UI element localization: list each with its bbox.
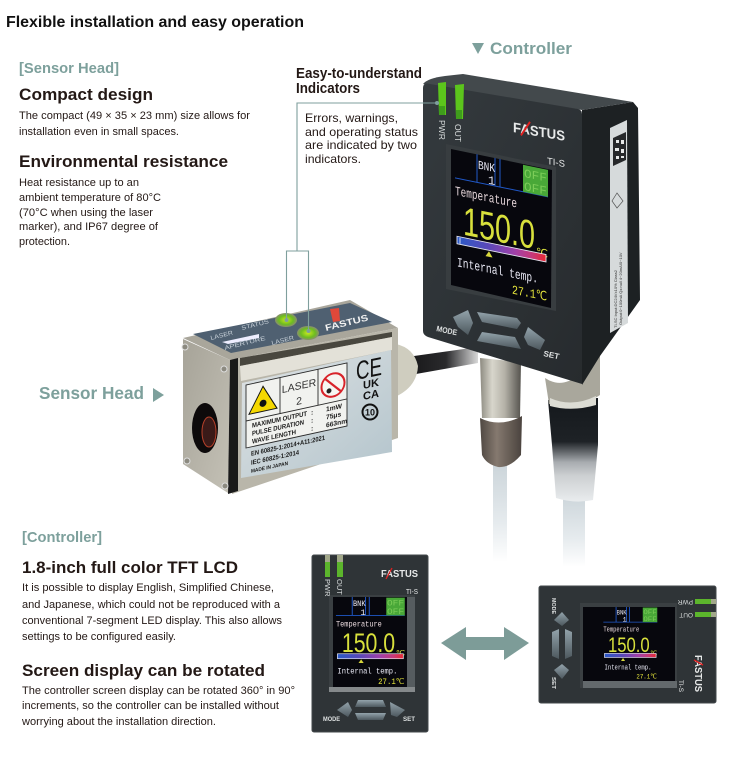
spec label	[610, 120, 628, 333]
warning label: LASER	[282, 377, 317, 396]
heading: LCD: 1.8-inch full color TFT LCD	[22, 558, 238, 577]
text: environmental resistance: ambient temperature of 80°C	[19, 192, 161, 204]
text: rotation: The controller screen display can be rotated 360° in 90°	[22, 685, 295, 697]
button label: MODE: MODE	[436, 324, 459, 337]
text: compact design: installation even in small spaces.	[19, 126, 179, 138]
bezel	[580, 603, 677, 688]
sensor front face	[183, 339, 230, 493]
red mark	[330, 308, 340, 322]
LED: laser	[297, 326, 319, 340]
plate markings: APERTURE	[224, 336, 266, 352]
warning label: IEC 60825-1:2014	[251, 449, 299, 467]
text: LCD: and Japanese, which could not be reproduced with a	[22, 599, 281, 611]
model name: TI-S	[406, 589, 418, 596]
plate markings: LASER	[210, 330, 235, 342]
heading: compact design: Compact design	[19, 85, 153, 104]
logo: FASTUS	[381, 569, 418, 580]
button label: MODE: MODE	[323, 717, 340, 723]
sensor cable fitting	[396, 344, 418, 396]
text: rotation: worrying about the installation direction.	[21, 716, 216, 728]
text: indicators callout: Errors, warnings,	[305, 111, 398, 125]
UKCA mark: CA	[363, 388, 379, 403]
screen: ℃	[396, 650, 405, 659]
connector: right with cable	[545, 352, 600, 567]
callout lines	[286, 103, 437, 331]
warning label: WAVE LENGTH	[252, 429, 296, 446]
warning label: MADE IN JAPAN	[251, 461, 288, 475]
model name: TI-S	[677, 680, 684, 693]
plate logo: FASTUS	[324, 313, 369, 333]
plate markings: STATUS	[241, 319, 270, 332]
model name: TI-S	[547, 156, 565, 170]
screen	[583, 607, 675, 681]
screen: BNK	[617, 610, 627, 617]
title: Flexible installation and easy operation	[6, 14, 304, 31]
double arrow	[441, 627, 529, 660]
warning label: :	[311, 409, 313, 417]
screen: 27.1℃	[378, 678, 404, 687]
sensor side	[230, 328, 398, 494]
warning label: EN 60825-1:2014+A11:2021	[251, 435, 325, 458]
screen: OFF	[387, 599, 404, 608]
controller top	[423, 74, 633, 110]
screws	[182, 344, 228, 489]
indicators: PWR	[323, 579, 332, 597]
text: indicators callout	[305, 111, 418, 166]
buttons	[552, 612, 572, 679]
text: LCD: settings to be configured easily.	[22, 631, 176, 643]
bezel	[329, 595, 415, 692]
screen: OFF	[387, 608, 404, 617]
connector: left with cable	[480, 358, 522, 562]
text: indicators callout: are indicated by two	[305, 138, 417, 152]
screen: OFF	[524, 180, 547, 199]
logo: FASTUS	[513, 119, 565, 144]
screen: 150.0	[463, 198, 535, 258]
screen bezel	[446, 144, 556, 311]
callout dots	[284, 101, 439, 333]
indicators	[323, 555, 344, 597]
indicators: PWR	[678, 598, 693, 605]
text: environmental resistance: Heat resistance up to an	[19, 177, 139, 189]
screen: ℃	[536, 248, 548, 262]
screen	[451, 149, 552, 308]
UKCA mark: UK	[363, 377, 379, 392]
10 year mark	[362, 404, 378, 420]
plate markings	[210, 319, 296, 352]
sensor dark edge	[228, 358, 238, 494]
warning label: :	[311, 417, 313, 425]
LED: status	[275, 313, 297, 327]
screen: 27.1℃	[636, 673, 657, 681]
warning label: PULSE DURATION	[252, 419, 304, 438]
text: indicators callout: and operating status	[305, 125, 418, 139]
screen: OFF	[643, 616, 657, 624]
screen: Internal temp.	[337, 666, 397, 676]
text: environmental resistance	[19, 177, 161, 248]
indicators: OUT	[335, 579, 344, 595]
spec label: Output:0~100mA Qx:null 4~20mA/0~10V	[618, 252, 623, 325]
warning label: 663nm	[326, 418, 347, 430]
screen: 150.0	[608, 633, 650, 657]
screen: OFF	[643, 609, 657, 617]
sensor top plate	[193, 303, 392, 353]
screen: Temperature	[603, 626, 639, 634]
UKCA mark	[363, 377, 379, 403]
cable: sensor head to controller	[414, 347, 478, 374]
warning label: 1mW	[326, 403, 343, 414]
section: sensor head text	[19, 60, 250, 248]
text: environmental resistance: protection.	[19, 236, 70, 248]
screen: 150.0	[342, 628, 395, 657]
body	[539, 586, 716, 703]
indicator: OUT	[453, 84, 464, 142]
spec label: TI-SC Input:DC24V±10% Class2	[613, 269, 618, 328]
warning label: MAXIMUM OUTPUT	[252, 411, 308, 430]
label: controller: [Controller]	[22, 529, 102, 546]
body	[312, 555, 428, 732]
screen: Temperature	[336, 619, 382, 630]
screen: BNK	[353, 600, 366, 609]
text: LCD: It is possible to display English, Simplified Chinese,	[22, 582, 274, 594]
controller: main unit	[423, 74, 640, 385]
screen: 1	[488, 174, 495, 189]
logo: FASTUS	[692, 655, 703, 692]
screen: BNK	[478, 159, 496, 176]
CE mark: CE	[356, 351, 382, 386]
text: LCD	[22, 582, 282, 643]
controller: upright	[312, 555, 428, 732]
warning label	[241, 350, 392, 478]
plate markings: LASER	[271, 335, 296, 347]
lens	[192, 403, 218, 453]
button label: MODE: MODE	[550, 598, 556, 614]
heading: indicators callout: Easy-to-understand	[296, 66, 422, 82]
controller side	[582, 102, 640, 385]
button label: SET: SET	[543, 349, 560, 361]
label: sensor head: Sensor Head	[39, 383, 144, 403]
screen: 1	[622, 617, 627, 624]
heading: indicators callout	[296, 66, 422, 97]
10 year mark: 10	[365, 408, 375, 418]
button label: SET: SET	[550, 677, 556, 690]
text: compact design: The compact (49 × 35 × 23 mm) size allows for	[19, 110, 250, 122]
warning label: :	[311, 425, 313, 433]
indicator: PWR: PWR	[437, 120, 447, 140]
heading: indicators callout: Indicators	[296, 81, 360, 97]
buttons	[453, 310, 545, 350]
warning label: 75μs	[326, 411, 341, 422]
screen	[333, 597, 407, 687]
text: indicators callout: indicators.	[305, 152, 361, 166]
indicator: PWR	[437, 82, 447, 140]
sensor top	[183, 300, 398, 360]
text: rotation	[21, 685, 295, 728]
text: compact design	[19, 110, 250, 138]
text: rotation: increments, so the controller can be installed without	[22, 700, 279, 712]
text: environmental resistance: marker), and IP67 degree of	[19, 221, 159, 233]
indicators: OUT	[679, 611, 693, 618]
text: environmental resistance: (70°C when using the laser	[19, 207, 153, 219]
screen: 1	[360, 608, 366, 618]
button label: SET: SET	[403, 717, 415, 723]
section: controller text	[21, 529, 295, 728]
screen: ℃	[650, 650, 657, 657]
screen: Internal temp.	[604, 665, 651, 673]
sensor head	[182, 300, 398, 494]
screen: 27.1℃	[512, 283, 547, 305]
warning label: 2	[296, 395, 302, 408]
screen: OFF	[524, 167, 547, 186]
label: controller: Controller	[490, 39, 572, 58]
buttons	[337, 700, 405, 720]
label: sensor head: [Sensor Head]	[19, 60, 119, 77]
heading: environmental resistance: Environmental resistance	[19, 152, 228, 171]
indicator: OUT: OUT	[453, 124, 463, 142]
indicators	[678, 598, 716, 618]
controller front	[423, 84, 582, 384]
text: LCD: conventional 7-segment LED display. This also allows	[22, 615, 282, 627]
heading: rotation: Screen display can be rotated	[22, 661, 265, 680]
controller: rotated	[539, 586, 716, 703]
screen: Internal temp.	[457, 255, 538, 287]
screen: Temperature	[455, 184, 517, 212]
